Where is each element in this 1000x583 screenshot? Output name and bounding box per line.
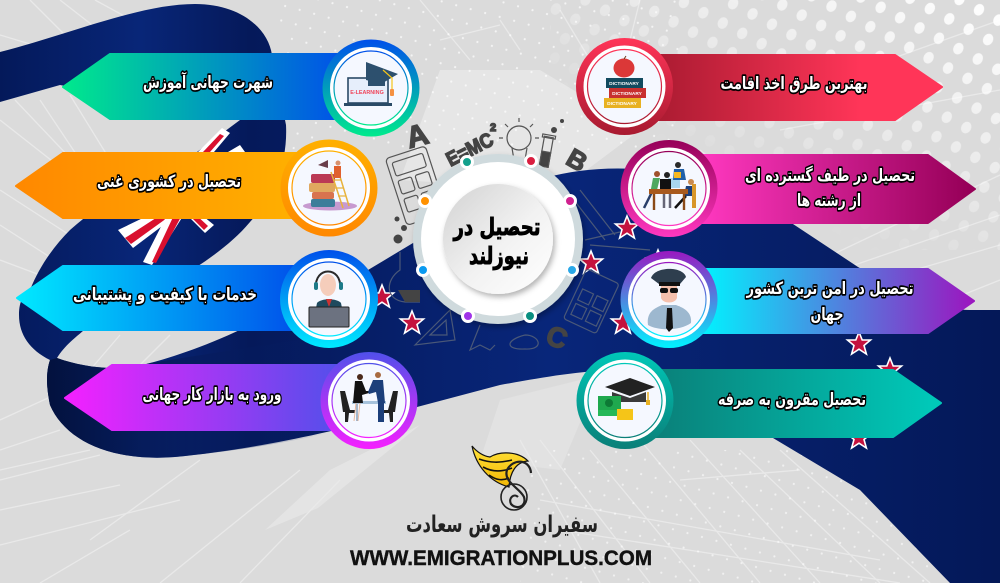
- hub title: [453, 213, 540, 270]
- icon: e-learning laptop: E-LEARNING: [350, 90, 384, 96]
- banner 1: global reputation: [63, 54, 345, 119]
- banner 3: quality services and support: [17, 266, 300, 330]
- banner 3: quality services and support: خدمات با کیفیت و پشتیبانی: [73, 285, 257, 305]
- education doodles: B: [561, 142, 593, 178]
- banner 7: safest country: جهان: [810, 305, 844, 325]
- icon: books and ladder: [280, 140, 378, 236]
- education doodles: A: [403, 118, 432, 155]
- banner 2: rich country: [16, 153, 300, 218]
- banner 7: safest country: تحصیل در امن ترین کشور: [746, 279, 914, 299]
- icon: apple and dictionaries: DICTIONARY: [612, 91, 643, 97]
- website url: WWW.EMIGRATIONPLUS.COM: [350, 547, 652, 570]
- icon: police officer: [620, 251, 718, 348]
- icon: apple and dictionaries: DICTIONARY: [607, 101, 638, 107]
- icon: apple and dictionaries: [576, 38, 673, 135]
- icon: study group: [620, 140, 718, 237]
- banner 5: best residency routes: [650, 55, 942, 120]
- logo: golden wing and swirl: [472, 446, 531, 510]
- central hub: [413, 154, 583, 324]
- icon: support agent: [280, 250, 378, 348]
- icon: handshake at table: [320, 352, 418, 449]
- banner 6: wide range of fields: تحصیل در طیف گسترده ای: [745, 165, 915, 186]
- union jack fragments: [118, 128, 245, 265]
- banner 8: cost-effective study: [650, 370, 941, 437]
- icon: e-learning laptop: [322, 40, 420, 136]
- hub title: تحصیل در: [453, 213, 540, 241]
- banner 7: safest country: [700, 269, 974, 333]
- icon: graduation cap and money: [576, 352, 674, 449]
- banner 6: wide range of fields: از رشته ها: [797, 191, 861, 211]
- hub title: نیوزلند: [469, 242, 529, 270]
- education doodles: C: [542, 319, 572, 355]
- banner 4: global job market: ورود به بازار کار جهانی: [142, 385, 282, 405]
- banner 8: cost-effective study: تحصیل مقرون به صرفه: [718, 390, 866, 410]
- banner 4: global job market: [65, 365, 345, 430]
- banner 1: global reputation: شهرت جهانی آموزش: [143, 71, 273, 93]
- logo wordmark: سفیران سروش سعادت: [406, 512, 598, 538]
- hub dots: [418, 156, 578, 322]
- education doodles: E=MC: [443, 129, 497, 171]
- banner 6: wide range of fields: [700, 155, 975, 223]
- banner 5: best residency routes: بهترین طرق اخذ اقامت: [720, 74, 868, 94]
- education doodles: [385, 118, 650, 355]
- education doodles: 2: [490, 122, 496, 134]
- stars: [370, 216, 902, 448]
- icon: apple and dictionaries: DICTIONARY: [609, 81, 640, 87]
- banner 2: rich country: تحصیل در کشوری غنی: [97, 172, 241, 192]
